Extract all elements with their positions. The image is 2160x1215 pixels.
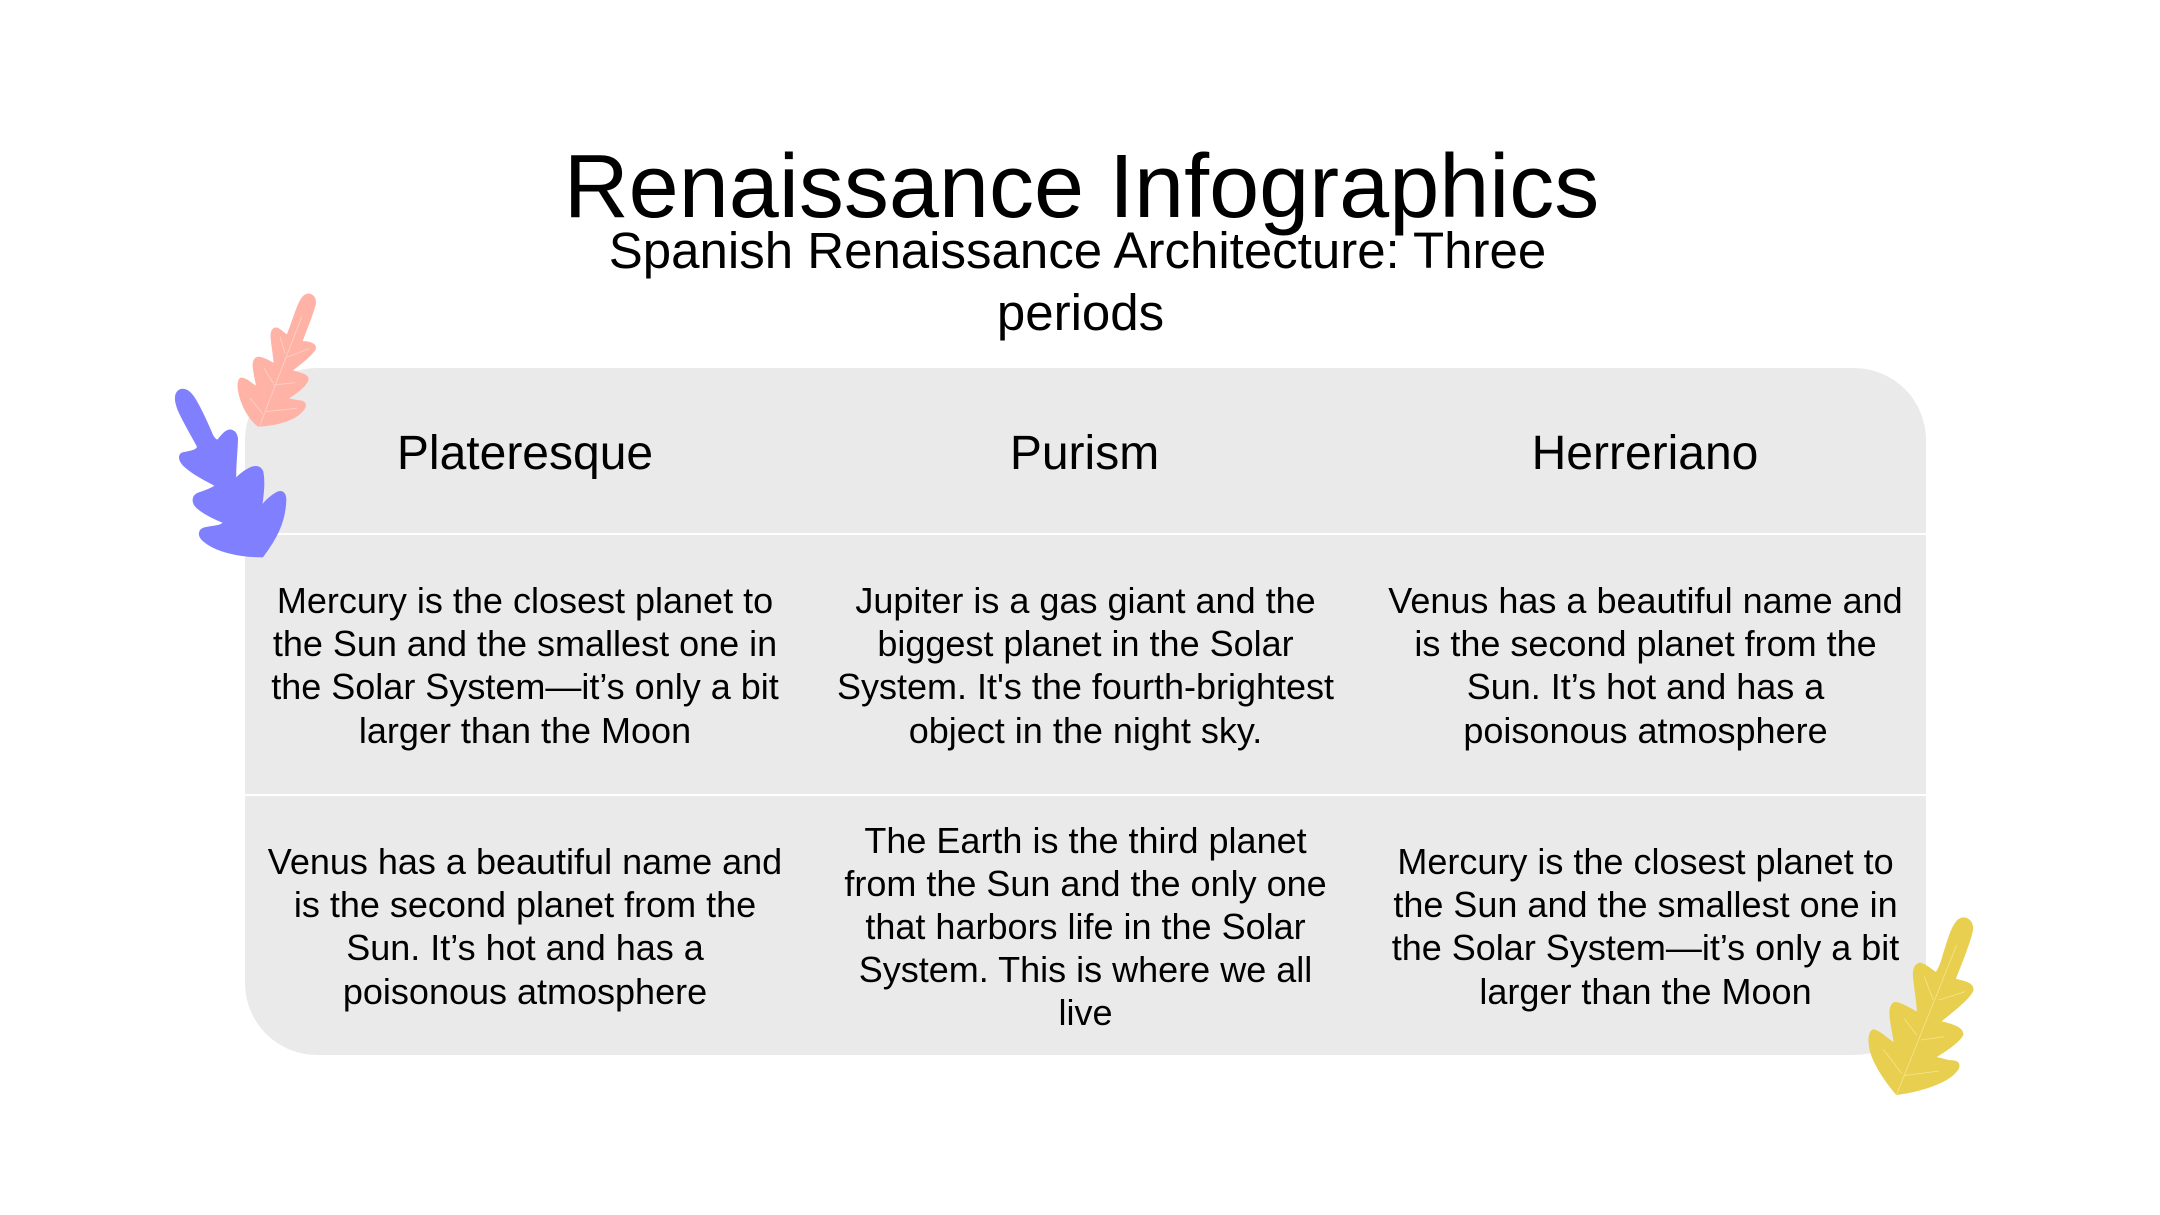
text: row 2 Purism: System. This is where we all	[859, 949, 1312, 990]
text: row 2 Purism: that harbors life in the Solar	[865, 906, 1306, 947]
text: row 2 Plateresque	[268, 841, 782, 1012]
text: row 2 Herreriano	[1392, 841, 1899, 1012]
text: row 2 Plateresque: poisonous atmosphere	[343, 971, 707, 1012]
icon: yellow leaf	[1869, 918, 1973, 1094]
text: row 1 Herreriano: Sun. It’s hot and has a	[1467, 666, 1824, 707]
text: row 1 Purism: object in the night sky.	[909, 710, 1262, 751]
subtitle	[609, 222, 1546, 340]
text: row 2 Plateresque: Venus has a beautiful name and	[268, 841, 782, 882]
text: row 1 Herreriano: poisonous atmosphere	[1463, 710, 1828, 751]
text: row 1 Purism: System. It's the fourth-brightest	[837, 666, 1334, 707]
text: row 1 Herreriano: Venus has a beautiful name and	[1388, 580, 1903, 621]
text: row 2 Purism: live	[1058, 992, 1113, 1033]
text: row 2 Herreriano: Mercury is the closest planet to	[1397, 841, 1894, 882]
text: row 1 Plateresque: the Solar System—it’s only a bit	[271, 666, 779, 707]
text: row 1 Purism: Jupiter is a gas giant and the	[855, 580, 1316, 621]
text: row 1 Plateresque: larger than the Moon	[359, 710, 691, 751]
text: row 2 Plateresque: Sun. It’s hot and has a	[346, 927, 704, 968]
column heading: Plateresque: Plateresque	[397, 427, 653, 480]
icon: blue leaf	[176, 389, 286, 557]
text: row 2 Purism: The Earth is the third planet	[864, 820, 1307, 860]
text: row 2 Herreriano: the Sun and the smallest one in	[1393, 884, 1898, 925]
text: row 1 Purism	[837, 580, 1334, 751]
panel: table background	[244, 368, 1926, 1055]
text: row 1 Purism: biggest planet in the Solar	[877, 623, 1294, 664]
text: row 2 Purism: from the Sun and the only one	[844, 863, 1327, 904]
text: row 1 Plateresque	[271, 580, 779, 751]
title: Renaissance Infographics	[564, 137, 1599, 237]
row divider: header	[244, 532, 1926, 535]
subtitle: Spanish Renaissance Architecture: Three	[609, 222, 1546, 278]
text: row 1 Plateresque: the Sun and the smallest one in	[273, 623, 777, 664]
row divider: rows	[244, 794, 1926, 796]
text: row 2 Herreriano: the Solar System—it’s only a bit	[1392, 927, 1899, 968]
column heading: Herreriano: Herreriano	[1532, 427, 1758, 480]
text: row 1 Herreriano	[1388, 580, 1903, 751]
text: row 2 Purism	[844, 820, 1327, 1033]
text: row 2 Plateresque: is the second planet from the	[294, 884, 756, 925]
icon: pink leaf	[238, 294, 315, 426]
subtitle: periods	[997, 284, 1164, 340]
text: row 2 Herreriano: larger than the Moon	[1479, 971, 1812, 1012]
column heading: Purism: Purism	[1010, 427, 1159, 480]
text: row 1 Plateresque: Mercury is the closest planet to	[277, 580, 773, 621]
text: row 1 Herreriano: is the second planet from the	[1414, 623, 1877, 664]
